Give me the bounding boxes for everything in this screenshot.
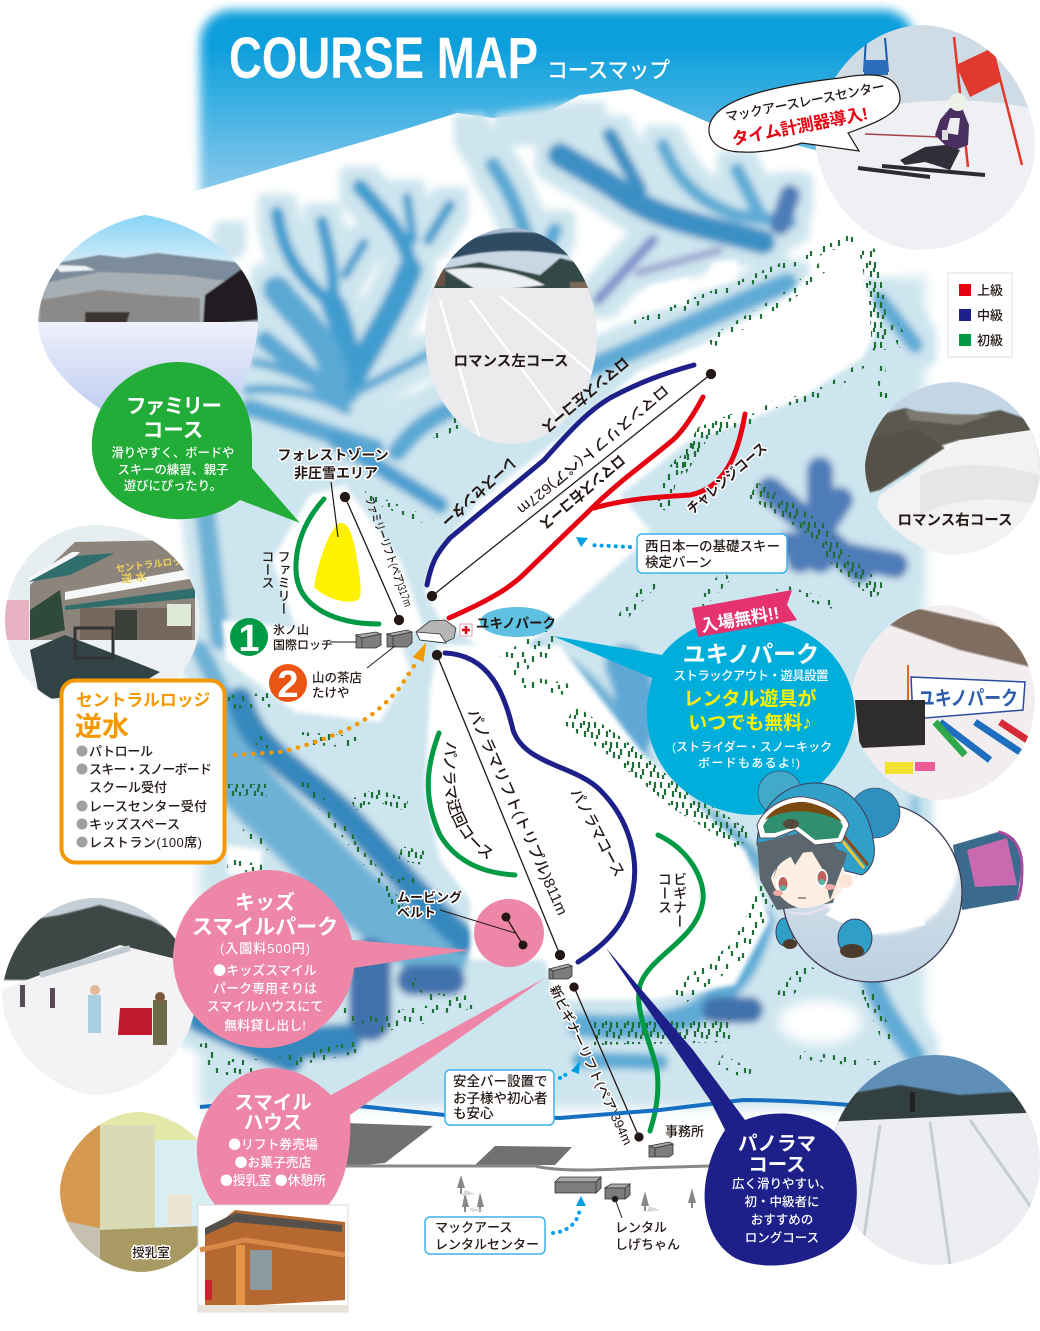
title: COURSE MAP <box>229 26 538 91</box>
label: rental shop: しげちゃん <box>615 1237 680 1252</box>
callout: kids smile park: スマイルパーク <box>192 916 338 939</box>
course and lift labels: 新ビギナーリフト(ペア)394m <box>547 983 635 1147</box>
hand <box>838 919 872 958</box>
legend <box>948 273 1012 357</box>
label: romance right: ロマンス右コース <box>898 512 1012 529</box>
callout: panorama course <box>606 948 857 1265</box>
course and lift labels <box>220 353 810 1186</box>
speech bubble: time measurement: マックアースレースセンター <box>724 79 886 124</box>
snowball body <box>782 786 962 982</box>
callout: rental center: マックアース <box>435 1220 512 1235</box>
callout: standard ski burn: 検定バーン <box>645 555 712 570</box>
info box: central lodge <box>62 680 224 862</box>
rental shop building <box>605 1184 630 1218</box>
callout: smile house: ●お菓子売店 <box>235 1152 312 1171</box>
office building <box>649 1142 673 1157</box>
callout: yukino park: ストラックアウト・遊具設置 <box>674 668 828 683</box>
light blue terrain field <box>200 275 925 1108</box>
title: コースマップ <box>547 58 670 83</box>
callout: family course: 滑りやすく、ボードや <box>112 445 234 460</box>
callout: yukino park: ボードもあるよ!) <box>698 756 800 770</box>
info box: central lodge: レストラン(100席) <box>89 835 202 850</box>
photo: romance right <box>860 378 1040 560</box>
first aid cross <box>460 624 472 636</box>
callout: smile house: ハウス <box>244 1112 302 1134</box>
callout: kids smile park: スマイルハウスにて <box>207 999 323 1014</box>
photo: yukino park <box>852 605 1035 800</box>
course and lift labels: レースセンター <box>437 453 519 529</box>
lodge 1 building <box>356 632 381 648</box>
mascot character <box>757 771 1022 982</box>
course and lift labels: パノラマリフト(トリプル)811m <box>464 706 570 918</box>
rental center building <box>555 1177 601 1193</box>
hat <box>757 783 874 875</box>
callout: kids smile park: 無料貸し出し! <box>224 1018 306 1033</box>
callout: standard ski burn: 西日本一の基礎スキー <box>645 538 780 554</box>
callout: family course: 遊びにぴったり。 <box>124 478 222 493</box>
callout: kids smile park <box>173 870 470 1048</box>
label: rental shop <box>615 1220 680 1252</box>
label: nursing room: 授乳室 <box>132 1245 170 1260</box>
photo: kids park <box>0 895 200 1100</box>
yukino park spot <box>476 607 556 637</box>
callout: yukino park: ユキノパーク <box>683 641 819 667</box>
callout: yukino park: (ストライダー・スノーキック <box>672 739 832 754</box>
info box: central lodge: 逆水 <box>75 712 129 742</box>
course and lift labels: パノラマ迂回コース <box>443 742 492 859</box>
course: romance left <box>427 365 694 585</box>
callout: panorama course: パノラマ <box>738 1133 816 1155</box>
course: beginner <box>639 835 703 1131</box>
arrow: lodge to map <box>235 645 425 755</box>
goggles <box>757 797 849 845</box>
marker 1: lodge: 国際ロッヂ <box>273 638 333 652</box>
forest zone area: 非圧雪エリア <box>294 465 378 481</box>
callout: panorama course: ロングコース <box>745 1230 819 1245</box>
callout: panorama course: コース <box>748 1154 806 1176</box>
course and lift labels: パノラマコース <box>567 786 627 880</box>
photo: panorama course <box>825 1050 1040 1270</box>
callout: panorama course: 広く滑りやすい、 <box>732 1176 832 1191</box>
new beginner lift <box>570 983 643 1141</box>
callout: family course <box>92 362 300 523</box>
central lodge building <box>416 620 456 643</box>
callout: kids smile park: (入園料500円) <box>220 941 310 956</box>
snowboard <box>953 832 1022 910</box>
photo: central lodge: セントラルロッジ <box>115 555 192 575</box>
photo: romance left <box>420 225 600 448</box>
forest zone area: フォレストゾーン <box>277 447 389 463</box>
info box: central lodge: スキー・スノーボード <box>89 762 212 777</box>
forest zone area <box>277 447 389 602</box>
marker 2: tea house: 山の茶店 <box>312 670 362 685</box>
label: romance left: ロマンス左コース <box>454 353 568 370</box>
callout: family course: スキーの練習、親子 <box>118 462 228 477</box>
legend: 中級 <box>977 308 1003 323</box>
lodge 2 building <box>387 630 412 647</box>
callout: safety bar: も安心 <box>453 1106 494 1121</box>
romance lift <box>428 370 716 600</box>
marker 2: tea house: 2 <box>277 664 299 706</box>
photo: yukino park: ユキノパーク <box>918 687 1018 710</box>
callout: safety bar: お子様や初心者 <box>453 1091 548 1106</box>
info box: central lodge: セントラルロッジ <box>76 691 210 710</box>
course and lift labels: チャレンジコース <box>684 439 770 517</box>
info box: central lodge: パトロール <box>89 744 153 759</box>
pompoms <box>758 771 900 838</box>
lifts <box>340 370 716 1141</box>
moving belt area: ベルト <box>397 905 436 920</box>
callout: family course: ファミリー <box>126 395 222 418</box>
course: challenge <box>594 414 745 508</box>
panorama lift station <box>549 964 572 979</box>
label: office: 事務所 <box>665 1124 704 1139</box>
foot <box>776 918 797 949</box>
white below road <box>0 1122 1040 1331</box>
photo: family course <box>38 215 258 410</box>
info box: central lodge: スクール受付 <box>89 780 167 795</box>
callout: rental center <box>425 1196 586 1254</box>
callout: yukino park <box>553 590 855 815</box>
buildings <box>332 607 673 1218</box>
photo: central lodge <box>5 525 200 702</box>
course and lift labels: コース <box>260 550 274 589</box>
callout: smile house: ●リフト券売場 <box>228 1134 318 1153</box>
label: rental shop: レンタル <box>615 1220 667 1235</box>
info box: central lodge: レースセンター受付 <box>89 799 207 814</box>
course: family <box>296 499 379 624</box>
sky background <box>200 10 915 270</box>
course and lift labels: コース <box>657 872 673 914</box>
callout: yukino park: レンタル遊具が <box>683 687 817 710</box>
moving belt area: ムービング <box>397 890 462 905</box>
face <box>771 835 853 915</box>
white pocket lower right <box>778 1000 862 1044</box>
course: panorama <box>445 653 635 962</box>
legend: 上級 <box>977 283 1003 298</box>
callout: panorama course: 初・中級者に <box>744 1194 820 1209</box>
course and lift labels: ロマンス右コース <box>536 451 628 532</box>
white slopes <box>222 247 925 1000</box>
callout: smile house: スマイル <box>234 1092 312 1114</box>
callout: kids smile park: パーク専用そりは <box>213 981 317 996</box>
moving belt area <box>397 890 544 967</box>
callout: kids smile park: ●キッズスマイル <box>213 960 317 979</box>
course and lift labels: ロマンスリフト(ペア)627m <box>514 381 671 517</box>
marker 2: tea house <box>269 664 362 706</box>
panorama lift <box>432 650 564 960</box>
course and lift labels: ファミリーリフト(ペア)317m <box>362 495 414 609</box>
blue ridges with halo <box>200 118 915 1062</box>
marker 1: lodge: 1 <box>238 618 260 660</box>
hair <box>757 833 847 910</box>
speech bubble: time measurement: タイム計測器導入! <box>730 104 869 149</box>
small tree icons <box>457 1175 696 1212</box>
callout: rental center: レンタルセンター <box>435 1237 539 1252</box>
callout: smile house: ●授乳室 ●休憩所 <box>220 1170 326 1189</box>
callout: kids smile park: キッズ <box>235 890 295 914</box>
course and lift labels: ビギナー <box>672 872 688 928</box>
yukino park spot: ユキノパーク <box>476 616 556 631</box>
callout: safety bar <box>445 1061 580 1125</box>
photo: smile house <box>198 1205 348 1312</box>
ribbon: free admission: 入場無料!! <box>699 603 781 636</box>
tree lines <box>202 237 905 1075</box>
legend: 初級 <box>977 333 1003 348</box>
callout: safety bar: 安全バー設置で <box>453 1074 548 1089</box>
courses <box>296 365 745 1131</box>
callout: standard ski burn <box>576 534 787 573</box>
marker 1: lodge: 氷ノ山 <box>273 623 309 637</box>
photo: central lodge: 逆 水 <box>121 569 147 586</box>
photo: race center skier <box>810 20 1040 255</box>
photo: nursing room <box>60 1112 215 1272</box>
speech bubble: time measurement <box>709 75 900 152</box>
course: panorama detour <box>428 733 515 875</box>
callout: smile house <box>197 978 545 1208</box>
mountain snow <box>192 89 925 1128</box>
callout: family course: コース <box>143 419 203 442</box>
ribbon: free admission <box>692 590 797 637</box>
info box: central lodge: キッズスペース <box>89 817 180 832</box>
course: romance right <box>449 397 703 618</box>
course and lift labels: ロマンス左コース <box>538 353 632 436</box>
callout: yukino park: いつでも無料♪ <box>688 712 812 734</box>
course and lift labels: ファミリー <box>276 550 290 615</box>
marker 1: lodge <box>230 618 333 660</box>
callout: panorama course: おすすめの <box>751 1213 813 1227</box>
road and parking <box>200 1100 850 1170</box>
marker 2: tea house: たけや <box>312 686 350 700</box>
family lift <box>340 492 404 624</box>
